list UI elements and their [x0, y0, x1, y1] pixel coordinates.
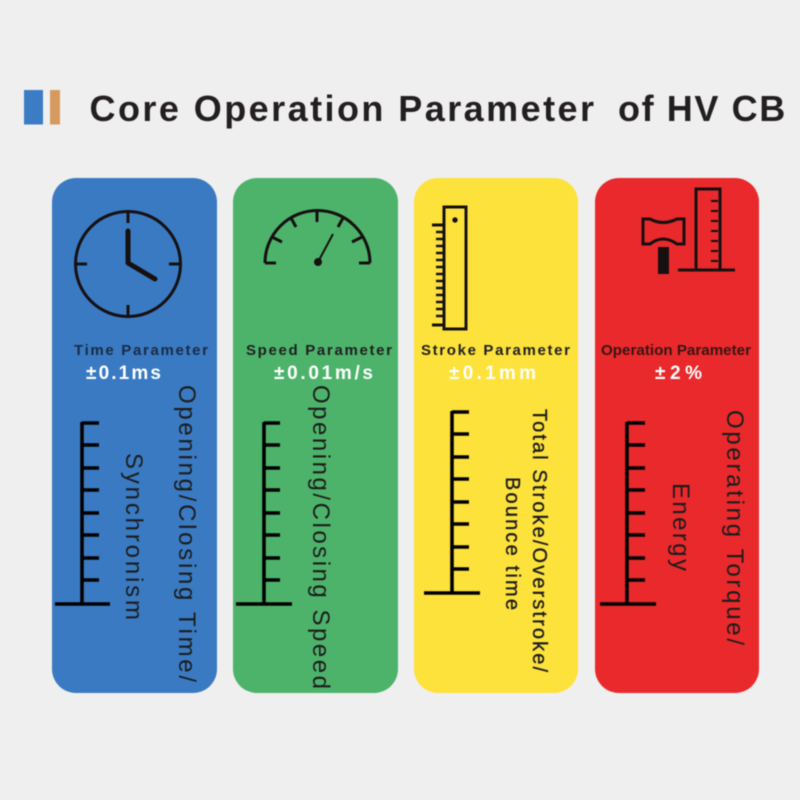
value: time tolerance: ±0.1ms	[86, 363, 161, 384]
scale	[55, 422, 110, 604]
text: energy: Energy	[667, 483, 694, 571]
scale	[236, 422, 292, 604]
panel: speed parameter	[233, 178, 398, 693]
value: stroke tolerance: ±0.1mm	[449, 363, 536, 384]
label: stroke parameter: Stroke Parameter	[421, 342, 570, 359]
title marker squares	[24, 90, 60, 124]
value: operation tolerance: ±2%	[655, 363, 702, 384]
icon: torque handle and ruler	[643, 189, 735, 274]
panel: operation parameter	[595, 178, 759, 693]
value: speed tolerance: ±0.01m/s	[274, 363, 373, 384]
icon: clock	[76, 212, 180, 316]
scale	[424, 411, 480, 593]
text: synchronism: Synchronism	[120, 453, 147, 620]
icon: speedometer	[265, 210, 370, 264]
text: total stroke/overstroke: Total Stroke/Overstroke/	[528, 409, 550, 672]
panel: stroke parameter	[414, 178, 578, 693]
scale	[600, 422, 656, 604]
label: operation parameter: Operation Parameter	[601, 342, 751, 359]
title: Core Operation Parameter	[90, 88, 609, 129]
icon: stroke ruler	[432, 207, 466, 329]
label: speed parameter: Speed Parameter	[246, 342, 392, 359]
text: opening/closing time: Opening/Closing Time/	[173, 385, 200, 682]
text: bounce time: Bounce time	[501, 477, 523, 610]
panel: time parameter	[52, 178, 217, 693]
label: time parameter: Time Parameter	[74, 342, 208, 359]
title: of HV CB	[618, 88, 787, 129]
text: opening/closing speed: Opening/Closing Speed	[307, 385, 334, 689]
text: operating torque: Operating Torque/	[721, 410, 748, 645]
